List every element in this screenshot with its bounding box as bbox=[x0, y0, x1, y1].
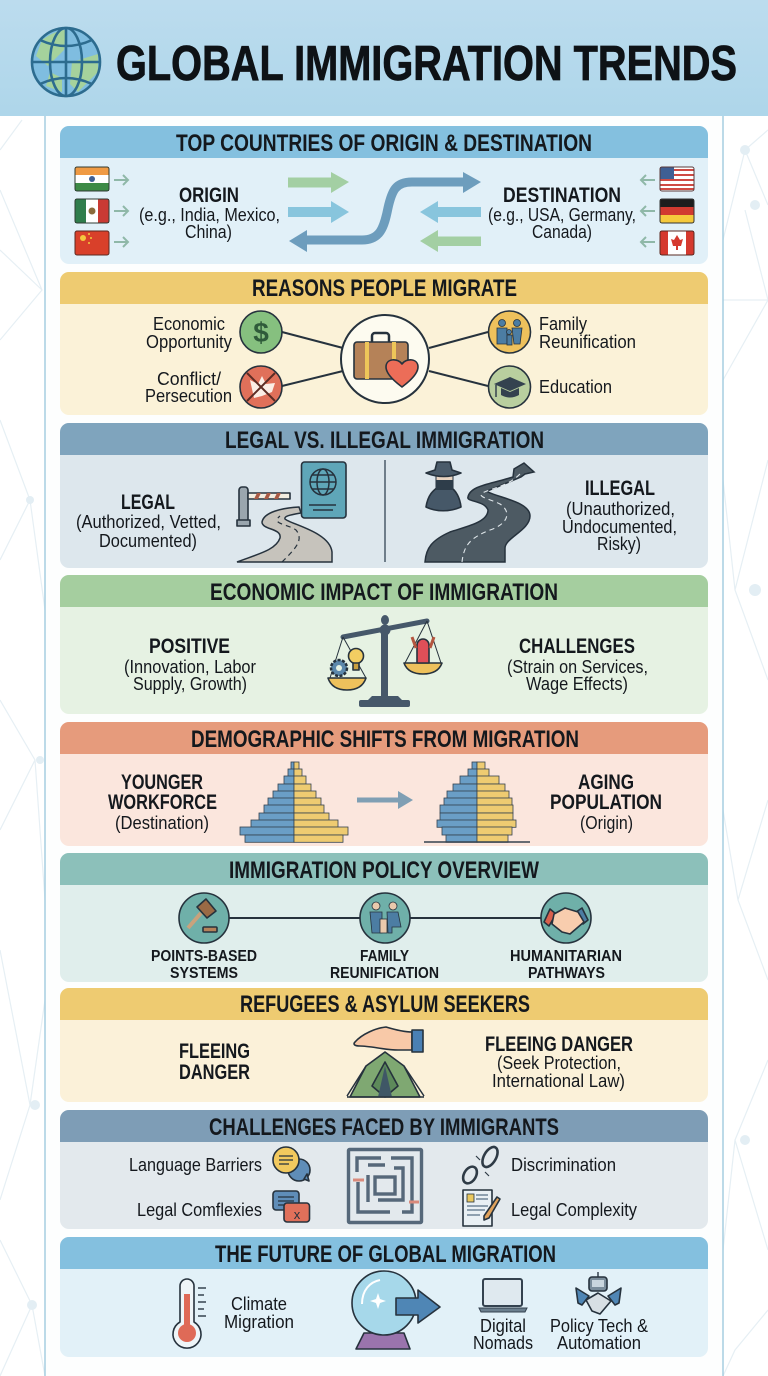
text: economic opportunity: Economic bbox=[153, 314, 225, 334]
text: positive: POSITIVE bbox=[149, 635, 230, 658]
icon: document and pen bbox=[463, 1190, 500, 1226]
destination text: (e.g., USA, Germany, bbox=[488, 205, 636, 225]
text: younger workforce: (Destination) bbox=[115, 813, 209, 833]
text: younger workforce: YOUNGER bbox=[121, 771, 203, 794]
icon: hooded figure bbox=[426, 462, 461, 511]
icon: broken chain bbox=[460, 1144, 501, 1186]
text: challenges: (Strain on Services, bbox=[507, 657, 648, 677]
origin flags bbox=[75, 167, 109, 255]
origin text: ORIGIN bbox=[179, 184, 239, 207]
text: economic opportunity bbox=[146, 314, 232, 352]
text: education: Education bbox=[539, 377, 612, 397]
divider bbox=[384, 460, 386, 562]
icon: crystal ball with arrow bbox=[352, 1271, 440, 1349]
text: legal complexity: Legal Complexity bbox=[511, 1200, 637, 1220]
icon: laptop bbox=[479, 1279, 527, 1312]
icon: dollar: $ bbox=[253, 317, 269, 348]
text: legal bbox=[76, 491, 221, 551]
icon: light road bbox=[237, 507, 332, 562]
text: digital nomads bbox=[473, 1316, 533, 1353]
text: fleeing danger: FLEEING bbox=[179, 1040, 250, 1063]
heading: IMMIGRATION POLICY OVERVIEW bbox=[229, 857, 540, 884]
icon: maze bbox=[348, 1150, 422, 1222]
text: fleeing danger bbox=[179, 1040, 250, 1084]
chart: young population pyramid bbox=[240, 762, 348, 842]
origin text: (e.g., India, Mexico, bbox=[139, 205, 280, 225]
heading: THE FUTURE OF GLOBAL MIGRATION bbox=[215, 1241, 556, 1268]
chart: aging population pyramid bbox=[424, 762, 530, 842]
header band bbox=[0, 0, 768, 116]
text: family reunification: REUNIFICATION bbox=[330, 965, 439, 982]
destination text: Canada) bbox=[532, 222, 592, 242]
text: conflict: Conflict/ bbox=[157, 369, 221, 389]
icon: globe bbox=[32, 28, 100, 96]
text: family reunification: FAMILY bbox=[360, 948, 409, 965]
icon: education bbox=[488, 366, 530, 408]
icon: handshake bbox=[541, 893, 591, 943]
heading: ECONOMIC IMPACT OF IMMIGRATION bbox=[210, 579, 558, 606]
panel: legal vs illegal bbox=[60, 423, 708, 568]
icon: conflicting bubbles: x bbox=[294, 1207, 301, 1222]
icon: suitcase and heart bbox=[341, 315, 429, 403]
icon: family bbox=[488, 311, 530, 353]
text: points-based systems: POINTS-BASED bbox=[151, 948, 257, 965]
text: family reunification bbox=[330, 948, 439, 982]
icon: robot handshake bbox=[576, 1272, 621, 1314]
text: policy tech: Policy Tech & bbox=[550, 1316, 648, 1336]
text: younger workforce: WORKFORCE bbox=[108, 791, 217, 814]
panel: immigration policy bbox=[60, 853, 708, 982]
icon: family bbox=[360, 893, 410, 943]
panel: refugees bbox=[60, 988, 708, 1102]
text: illegal: (Unauthorized, bbox=[566, 499, 675, 519]
text: illegal: Risky) bbox=[597, 534, 641, 554]
connector lines bbox=[282, 332, 488, 386]
text: aging population: AGING bbox=[578, 771, 634, 794]
text: digital nomads: Nomads bbox=[473, 1333, 533, 1353]
text: policy tech bbox=[550, 1316, 648, 1353]
text: humanitarian pathways: HUMANITARIAN bbox=[510, 948, 622, 965]
text: seek protection: (Seek Protection, bbox=[497, 1053, 621, 1073]
origin text: China) bbox=[185, 222, 232, 242]
text: points-based systems bbox=[151, 948, 257, 982]
icon: speech bubbles bbox=[273, 1147, 310, 1181]
text: aging population: (Origin) bbox=[580, 813, 633, 833]
icon: sheltering hand over tent bbox=[347, 1027, 424, 1097]
text: seek protection: FLEEING DANGER bbox=[485, 1033, 633, 1056]
panel: reasons people migrate bbox=[60, 272, 708, 415]
text: challenges: CHALLENGES bbox=[519, 635, 635, 658]
text: illegal bbox=[562, 477, 677, 554]
text: legal: (Authorized, Vetted, bbox=[76, 512, 221, 532]
panel: economic impact bbox=[60, 575, 708, 714]
origin small arrows bbox=[114, 175, 128, 247]
text: policy tech: Automation bbox=[557, 1333, 641, 1353]
icon: passport bbox=[302, 462, 346, 518]
panel: top countries bbox=[60, 126, 708, 264]
heading: REASONS PEOPLE MIGRATE bbox=[252, 275, 517, 302]
text: legal complexities: Legal Comflexies bbox=[137, 1200, 262, 1220]
text: conflict: Persecution bbox=[145, 386, 232, 406]
destination small arrows bbox=[641, 175, 655, 247]
text: humanitarian pathways bbox=[510, 948, 622, 982]
text: aging population bbox=[550, 771, 662, 833]
heading: LEGAL VS. ILLEGAL IMMIGRATION bbox=[225, 427, 544, 454]
migration arrows bbox=[288, 172, 481, 252]
text: points-based systems: SYSTEMS bbox=[170, 965, 238, 982]
icon: dark road bbox=[425, 463, 534, 562]
text: illegal: ILLEGAL bbox=[585, 477, 655, 500]
text: climate migration: Climate bbox=[231, 1294, 287, 1314]
text: positive bbox=[124, 635, 256, 694]
text: family reunification: Reunification bbox=[539, 332, 636, 352]
icon: conflicting bubbles bbox=[273, 1191, 310, 1222]
text: conflict bbox=[145, 369, 232, 406]
text: younger workforce bbox=[108, 771, 217, 833]
heading: DEMOGRAPHIC SHIFTS FROM MIGRATION bbox=[191, 726, 579, 753]
text: seek protection bbox=[485, 1033, 633, 1091]
text: language barriers: Language Barriers bbox=[129, 1155, 262, 1175]
text: family reunification bbox=[539, 314, 636, 352]
text: illegal: Undocumented, bbox=[562, 517, 677, 537]
destination text: DESTINATION bbox=[503, 184, 621, 207]
arrow: shift bbox=[357, 791, 413, 809]
panel: future of migration bbox=[60, 1237, 708, 1357]
icon: barrier bbox=[237, 487, 290, 526]
text: climate migration bbox=[224, 1294, 294, 1332]
text: challenges: Wage Effects) bbox=[526, 674, 628, 694]
heading: TOP COUNTRIES OF ORIGIN & DESTINATION bbox=[176, 130, 592, 157]
text: positive: (Innovation, Labor bbox=[124, 657, 256, 677]
text: humanitarian pathways: PATHWAYS bbox=[528, 965, 605, 982]
text: family reunification: Family bbox=[539, 314, 587, 334]
origin text bbox=[139, 184, 280, 242]
text: fleeing danger: DANGER bbox=[179, 1061, 250, 1084]
panel: challenges bbox=[60, 1110, 708, 1229]
destination text bbox=[488, 184, 636, 242]
icon: thermometer bbox=[173, 1279, 206, 1348]
icon: balance scale bbox=[328, 615, 442, 707]
text: discrimination: Discrimination bbox=[511, 1155, 616, 1175]
text: climate migration: Migration bbox=[224, 1312, 294, 1332]
icon: conflict bbox=[240, 366, 282, 408]
timeline line bbox=[229, 917, 541, 919]
text: seek protection: International Law) bbox=[492, 1071, 625, 1091]
heading: CHALLENGES FACED BY IMMIGRANTS bbox=[209, 1114, 559, 1141]
text: legal: LEGAL bbox=[121, 491, 175, 514]
text: challenges bbox=[507, 635, 648, 694]
text: economic opportunity: Opportunity bbox=[146, 332, 232, 352]
icon: dollar bbox=[240, 311, 282, 353]
text: digital nomads: Digital bbox=[480, 1316, 526, 1336]
text: positive: Supply, Growth) bbox=[133, 674, 247, 694]
text: aging population: POPULATION bbox=[550, 791, 662, 814]
panel: demographic shifts bbox=[60, 722, 708, 846]
text: legal: Documented) bbox=[99, 531, 197, 551]
icon: gavel bbox=[179, 893, 229, 943]
heading: REFUGEES & ASYLUM SEEKERS bbox=[240, 991, 530, 1018]
destination flags bbox=[660, 167, 694, 255]
